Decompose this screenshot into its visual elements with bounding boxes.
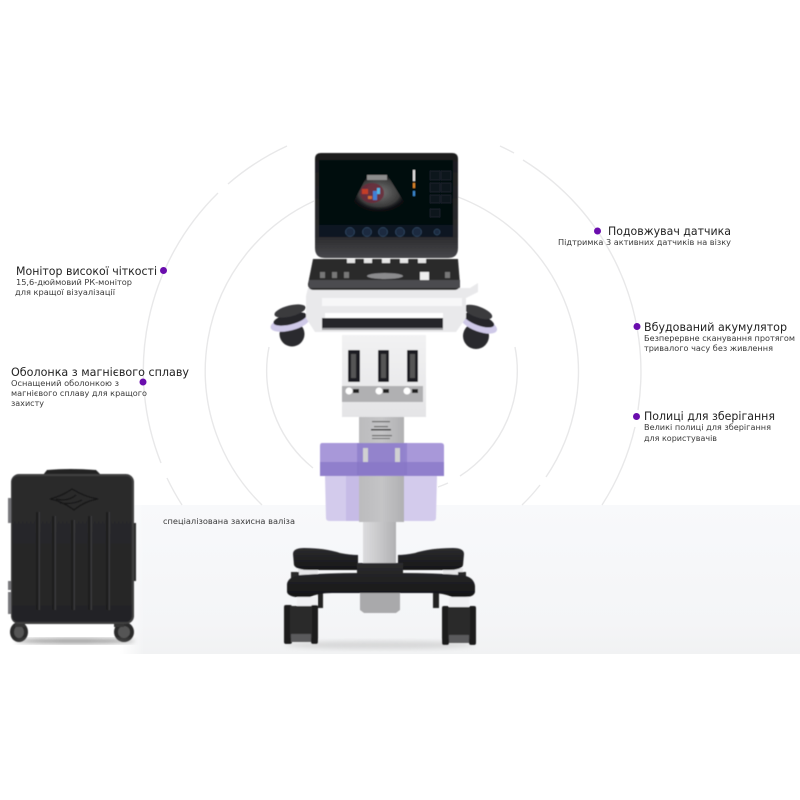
- callout: probe extender: Підтримка 3 активних датчиків на візку: [558, 237, 731, 247]
- lower column: [363, 520, 396, 570]
- front wheels: [284, 597, 476, 645]
- callout: magnesium alloy shell: Оболонка з магнієвого сплаву: [11, 365, 189, 379]
- caption: protective case: спеціалізована захисна валіза: [163, 516, 295, 526]
- floor band: [0, 505, 800, 654]
- screen dials: [346, 228, 440, 236]
- callout: storage shelves: для користувачів: [644, 433, 717, 443]
- ultrasound image: [352, 176, 406, 212]
- callout: high-definition monitor: Монітор високої чіткості: [16, 264, 157, 278]
- callout: built-in battery: тривалого часу без живлення: [644, 343, 773, 353]
- suitcase wheels: [10, 621, 134, 642]
- storage basket lower: [325, 476, 437, 521]
- probe ports: [348, 350, 418, 382]
- main column: [359, 417, 404, 522]
- column label: [371, 421, 392, 439]
- callout: built-in battery: Безперервне сканування протягом: [644, 333, 795, 343]
- ultrasound cart: [269, 153, 499, 649]
- suitcase handle: [43, 469, 101, 475]
- concentric signal arcs: [143, 146, 641, 505]
- callout: storage shelves: Полиці для зберігання: [644, 409, 775, 423]
- suitcase logo: [50, 489, 98, 510]
- callout: magnesium alloy shell: захисту: [11, 398, 44, 408]
- callout: magnesium alloy shell: [11, 365, 189, 408]
- storage basket rim: [320, 443, 444, 476]
- probe holder block: [342, 335, 426, 417]
- callout: probe extender: [558, 224, 731, 247]
- left probe holder: [269, 302, 311, 346]
- monitor screen: [319, 160, 453, 237]
- lower base: [287, 563, 475, 597]
- foot pedal: [360, 590, 400, 613]
- callout: high-definition monitor: 15,6-дюймовий РК-монітор: [16, 277, 132, 287]
- callout: high-definition monitor: [15, 264, 167, 297]
- protective suitcase: [8, 469, 136, 642]
- callout: built-in battery: [634, 320, 795, 353]
- suitcase side clips: [8, 498, 136, 614]
- right probe holder: [459, 302, 499, 349]
- callout: probe extender: Подовжувач датчика: [608, 224, 731, 238]
- upper base wings: [293, 548, 358, 570]
- callout: built-in battery: Вбудований акумулятор: [644, 320, 787, 334]
- colour scale: [413, 170, 415, 181]
- callout: magnesium alloy shell: Оснащений оболонкою з: [11, 378, 119, 388]
- cart floor shadow: [285, 641, 475, 649]
- callout: storage shelves: Великі полиці для зберігання: [644, 422, 771, 432]
- hinge keys: [347, 259, 426, 263]
- wheel shadow under suitcase: [15, 638, 135, 644]
- control panel keyboard: [308, 259, 460, 290]
- screen side menu: [430, 171, 451, 217]
- back wheels and castors: [291, 568, 466, 608]
- callout: magnesium alloy shell: магнієвого сплаву для кращого: [11, 388, 147, 398]
- suitcase shell: [11, 474, 134, 624]
- monitor lid: [315, 153, 458, 258]
- callout: high-definition monitor: для кращої візуалізації: [15, 287, 116, 297]
- console tray: [306, 283, 478, 332]
- callout: storage shelves: [633, 409, 775, 443]
- port lever strip: [342, 386, 423, 402]
- suitcase ribs: [36, 512, 108, 610]
